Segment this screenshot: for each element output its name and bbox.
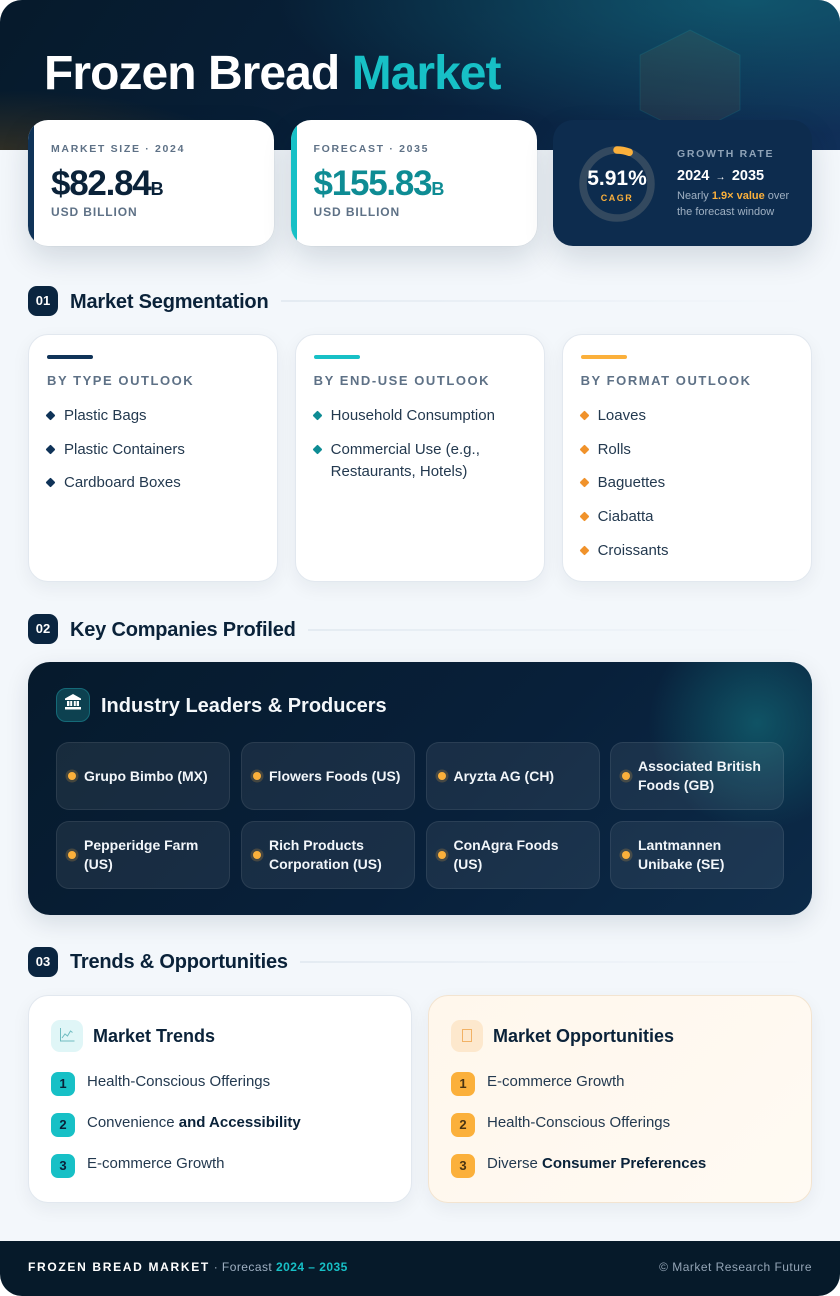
title: Frozen Bread Market [44, 47, 501, 100]
hexagon decoration [640, 30, 740, 120]
panel: by end-use [295, 334, 545, 582]
panel: market trends: Market Trends [93, 1026, 215, 1046]
growth years: 2024 2035 [677, 168, 764, 184]
stat card: forecast: $155.83B [314, 164, 444, 203]
growth note: the forecast window [677, 206, 774, 218]
panel: market opportunities: Market Opportunities [493, 1026, 674, 1046]
company: Grupo Bimbo [56, 742, 230, 810]
panel: by type: BY TYPE OUTLOOK [47, 373, 194, 388]
company: Flowers Foods: Flowers Foods (US) [269, 768, 400, 784]
panel: by type: Plastic Bags [64, 407, 147, 424]
panel: by type: Plastic Containers [64, 441, 185, 458]
company: Rich Products: Rich Products Corporation (US) [269, 837, 382, 872]
stat card: forecast: FORECAST · 2035 [314, 143, 429, 155]
company: Associated British Foods [610, 742, 784, 810]
section number 03: 03 [36, 954, 50, 969]
stat card: forecast [291, 120, 537, 246]
section heading: segmentation: Market Segmentation [70, 290, 268, 312]
company: ConAgra: ConAgra Foods (US) [454, 837, 558, 872]
growth note: Nearly 1.9× value over [677, 190, 789, 202]
panel: market opportunities: 2 [459, 1117, 467, 1132]
panel: by type [28, 334, 278, 582]
panel: by format: BY FORMAT OUTLOOK [581, 373, 752, 388]
stat card: market size: USD BILLION [51, 205, 138, 219]
company: Rich Products [241, 821, 415, 889]
panel: market trends: Health-Conscious Offerings [87, 1072, 270, 1090]
section number 03 [28, 947, 58, 977]
panel: by format: Croissants [598, 542, 668, 559]
section number 01: 01 [36, 293, 50, 308]
panel: market opportunities: E-commerce Growth [487, 1072, 625, 1090]
CAGR value: 5.91% [587, 167, 647, 190]
panel: by format: Ciabatta [598, 508, 653, 525]
panel: market opportunities [428, 995, 812, 1203]
company: Pepperidge Farm: Pepperidge Farm (US) [84, 837, 198, 872]
growth years: → [716, 172, 726, 183]
section heading: trends: Trends & Opportunities [70, 950, 288, 972]
panel: market opportunities: Health-Conscious Offerings [487, 1114, 670, 1130]
panel: market trends: 3 [59, 1158, 67, 1173]
footer [0, 1241, 840, 1296]
panel: market opportunities: 3 [459, 1158, 467, 1173]
icon: placeholder box [451, 1020, 483, 1052]
footer credit: © Market Research Future [659, 1260, 812, 1274]
section heading: companies: Key Companies Profiled [70, 618, 296, 640]
icon: chart [51, 1020, 83, 1052]
panel: market trends: E-commerce Growth [87, 1154, 225, 1172]
stat card: market size: $82.84B [51, 164, 164, 203]
stat card: forecast: USD BILLION [314, 205, 400, 219]
panel: industry leaders [28, 662, 812, 915]
company: Aryzta: Aryzta AG (CH) [454, 768, 554, 784]
panel: by end-use: Commercial Use (e.g., [331, 441, 480, 458]
panel: market opportunities: 1 [459, 1076, 467, 1091]
panel: market trends [28, 995, 412, 1203]
company: Aryzta [426, 742, 600, 810]
section number 01 [28, 286, 58, 316]
company: Flowers Foods [241, 742, 415, 810]
panel: market trends: 2 [59, 1117, 67, 1132]
panel: by format [562, 334, 812, 582]
panel: by end-use: Restaurants, Hotels) [331, 462, 467, 480]
section number 02 [28, 614, 58, 644]
company: Lantmannen [610, 821, 784, 889]
footer title: FROZEN BREAD MARKET · Forecast 2024 – 2035 [28, 1260, 348, 1274]
panel: by type: Cardboard Boxes [64, 474, 181, 491]
growth note [677, 190, 789, 218]
growth label: GROWTH RATE [677, 148, 774, 160]
stat card: growth rate [553, 120, 812, 246]
panel: by end-use: Household Consumption [331, 407, 495, 424]
company: ConAgra [426, 821, 600, 889]
panel heading: Industry Leaders & Producers [101, 694, 387, 716]
section number 02: 02 [36, 621, 50, 636]
panel: by end-use: BY END-USE OUTLOOK [314, 373, 490, 388]
panel: by format: Baguettes [598, 474, 665, 491]
panel: market opportunities: Diverse Consumer Preferences [487, 1154, 706, 1172]
company: Grupo Bimbo: Grupo Bimbo (MX) [84, 768, 208, 784]
panel: market trends: Convenience and Accessibility [87, 1114, 301, 1130]
CAGR ring [579, 146, 655, 222]
header band [0, 0, 840, 150]
company: Pepperidge Farm [56, 821, 230, 889]
panel: by format: Loaves [598, 407, 646, 424]
CAGR label: CAGR [601, 193, 633, 203]
panel: by format: Rolls [598, 441, 631, 458]
panel: market trends: 1 [59, 1076, 67, 1091]
company: Lantmannen: Lantmannen Unibake (SE) [638, 837, 724, 872]
icon: bank [56, 688, 90, 722]
stat card: market size [28, 120, 274, 246]
stat card: market size: MARKET SIZE · 2024 [51, 143, 185, 155]
company: Associated British Foods: Associated British Foods (GB) [638, 758, 761, 793]
